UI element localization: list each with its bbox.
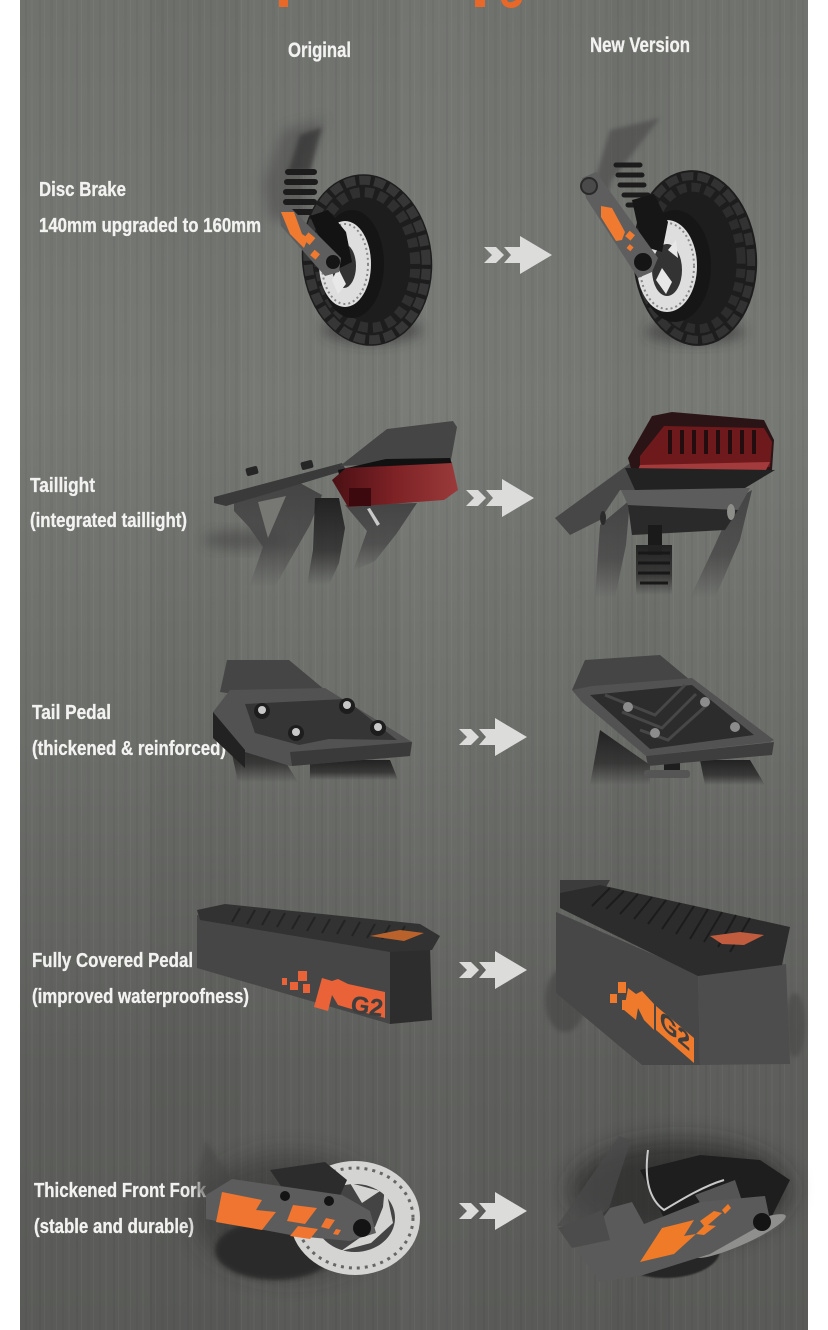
text: Taillight label: [30, 475, 187, 532]
arrow: row 4: [459, 951, 527, 989]
text: Tail Pedal label: (thickened & reinforced): [32, 738, 226, 760]
text: Taillight label: Taillight: [30, 475, 95, 497]
text: Fully Covered Pedal label: Fully Covered Pedal: [32, 950, 193, 972]
illustration: original disc brake wheel: [263, 118, 441, 352]
heading: New Version: New Version: [590, 34, 690, 57]
text: Disc Brake label: [39, 179, 261, 237]
text: Thickened Front Fork label: Thickened Front Fork: [34, 1180, 207, 1202]
illustration: original tail pedal: [213, 660, 412, 782]
text: Fully Covered Pedal label: [32, 950, 249, 1008]
text: Fully Covered Pedal label: (improved waterproofness): [32, 986, 249, 1008]
arrow: row 1: [484, 236, 552, 274]
text: Taillight label: (integrated taillight): [30, 510, 187, 532]
logo text: G2: G2: [660, 1005, 690, 1057]
arrow: row 3: [459, 718, 527, 756]
text: Tail Pedal label: Tail Pedal: [32, 702, 111, 724]
text: Thickened Front Fork label: (stable and durable): [34, 1216, 194, 1238]
illustration: new fully covered pedal: [545, 880, 805, 1065]
arrow: row 5: [459, 1192, 527, 1230]
logo text: G2: G2: [349, 991, 385, 1022]
illustration: original taillight: [203, 421, 458, 587]
text: Disc Brake label: Disc Brake: [39, 179, 126, 201]
illustration: new taillight: [555, 412, 775, 598]
arrow: row 2: [466, 479, 534, 517]
title fragment: clipped orange heading: [279, 0, 522, 8]
illustration: new disc brake wheel: [581, 118, 763, 350]
text: Thickened Front Fork label: [34, 1180, 207, 1238]
heading: Original: Original: [288, 39, 351, 62]
illustration: original fully covered pedal: [197, 904, 440, 1024]
illustration: new tail pedal: [572, 655, 774, 785]
illustration: new thickened front fork: [557, 1136, 790, 1282]
text: Tail Pedal label: [32, 702, 226, 760]
illustration: original thickened front fork: [195, 1140, 420, 1280]
text: Disc Brake label: 140mm upgraded to 160mm: [39, 215, 261, 237]
